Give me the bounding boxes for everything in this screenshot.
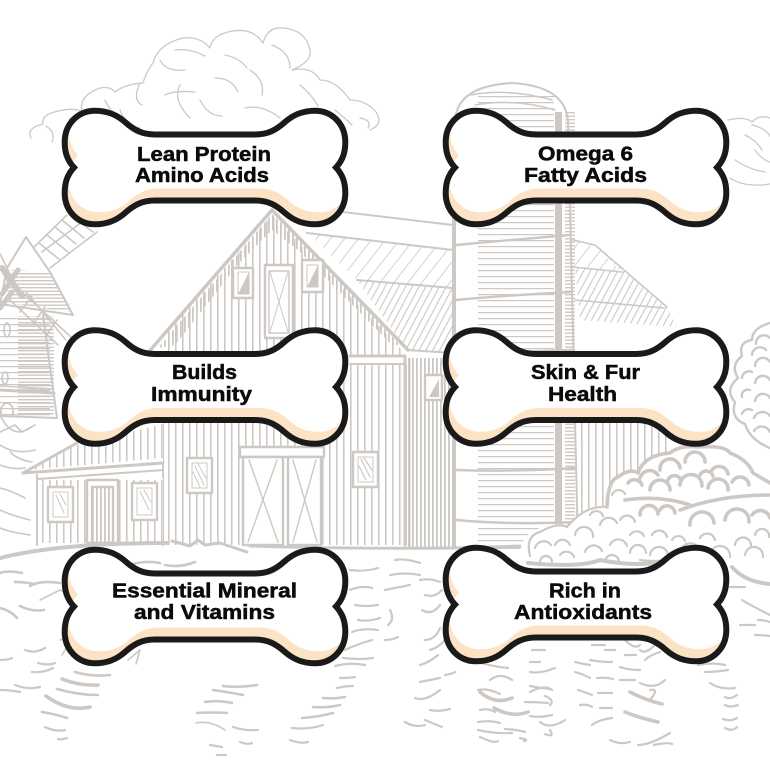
label: Amino Acids: Amino Acids	[135, 165, 269, 187]
barn windows and doors	[187, 260, 442, 545]
main barn front	[136, 210, 453, 548]
label: and Vitamins: and Vitamins	[134, 602, 275, 624]
bush	[518, 447, 770, 575]
label: Fatty Acids: Fatty Acids	[524, 165, 647, 187]
lean-to shed	[23, 420, 163, 545]
right cloud	[728, 117, 770, 185]
right tree	[730, 323, 770, 448]
label: Antioxidants: Antioxidants	[514, 602, 652, 624]
bone: Lean Protein Amino Acids	[65, 99, 349, 224]
label: Essential Mineral: Essential Mineral	[112, 580, 297, 602]
top cloud	[30, 28, 379, 142]
label: Builds: Builds	[172, 362, 237, 384]
label: Rich in: Rich in	[549, 580, 621, 602]
bone: Skin and Fur Health	[446, 318, 730, 444]
label: Omega 6: Omega 6	[538, 144, 633, 166]
bone: Omega 6 Fatty Acids	[446, 99, 730, 224]
bone: Builds Immunity	[65, 318, 349, 444]
windmill	[0, 215, 97, 418]
rear building behind silo	[573, 240, 677, 520]
silo	[455, 83, 578, 548]
label: Immunity: Immunity	[151, 384, 253, 406]
ground strokes	[0, 415, 770, 755]
main barn side roof	[307, 212, 453, 548]
label: Lean Protein: Lean Protein	[137, 144, 271, 166]
bone: Rich in Antioxidants	[446, 536, 730, 661]
label: Health: Health	[548, 384, 617, 406]
label: Skin & Fur: Skin & Fur	[531, 362, 640, 384]
bone: Essential Mineral and Vitamins	[65, 538, 349, 663]
